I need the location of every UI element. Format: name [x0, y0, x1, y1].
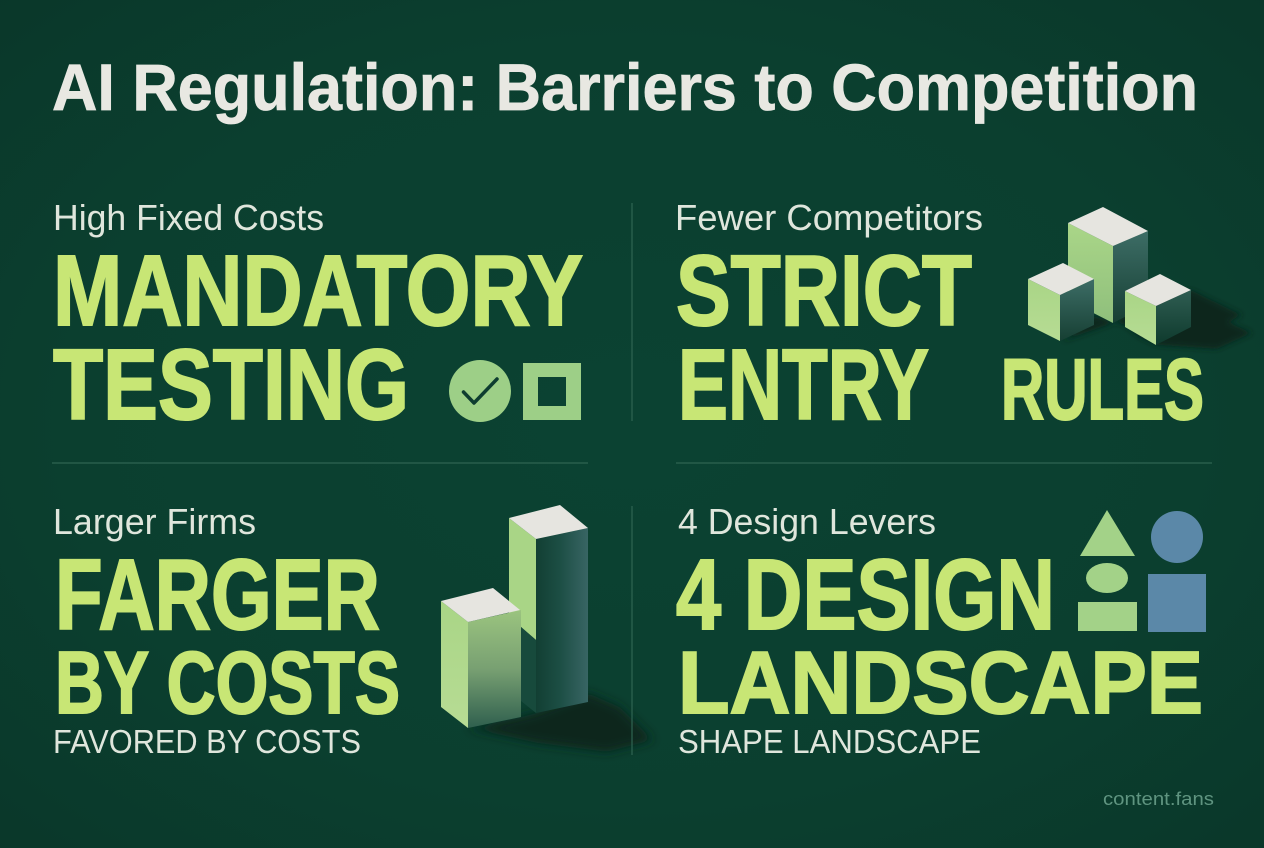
panel: larger firms	[53, 501, 653, 760]
headline: strict entry: STRICT	[676, 235, 972, 347]
panel: mandatory testing	[53, 197, 583, 441]
footer credit: content.fans	[1103, 789, 1214, 809]
panel: design levers	[676, 501, 1206, 760]
subheading: high fixed costs: High Fixed Costs	[53, 197, 324, 238]
icon: hollow square	[523, 363, 581, 420]
icon: blue square	[1148, 574, 1206, 632]
icon: green rectangle	[1078, 602, 1137, 631]
headline: farger by costs: FARGER	[55, 539, 380, 651]
caption: shape landscape: SHAPE LANDSCAPE	[678, 723, 981, 760]
icon: blue circle	[1151, 511, 1203, 563]
headline: 4 design landscape	[676, 539, 1203, 732]
subheading: larger firms: Larger Firms	[53, 501, 256, 542]
icon: check circle	[449, 360, 511, 422]
icon: triangle	[1080, 510, 1135, 556]
icon: ellipse	[1086, 563, 1128, 593]
headline: farger by costs: BY COSTS	[55, 633, 400, 732]
illustration: isometric bars	[441, 505, 653, 752]
headline: 4 design landscape: 4 DESIGN	[676, 539, 1055, 651]
headline: 4 design landscape: LANDSCAPE	[678, 633, 1203, 732]
headline: farger by costs	[55, 539, 400, 732]
headline: strict entry: ENTRY	[678, 329, 929, 441]
caption: favored by costs: FAVORED BY COSTS	[53, 723, 361, 760]
headline: strict entry	[676, 235, 972, 441]
illustration: isometric cubes	[1028, 207, 1252, 349]
panel: strict entry rules	[675, 197, 1252, 441]
headline: mandatory testing: TESTING	[53, 329, 409, 441]
subheading: fewer competitors: Fewer Competitors	[675, 197, 983, 238]
headline: mandatory testing: MANDATORY	[53, 235, 583, 347]
title: AI Regulation: Barriers to Competition	[52, 50, 1198, 124]
subheading: 4 design levers: 4 Design Levers	[678, 501, 936, 542]
headline: mandatory testing	[53, 235, 583, 441]
